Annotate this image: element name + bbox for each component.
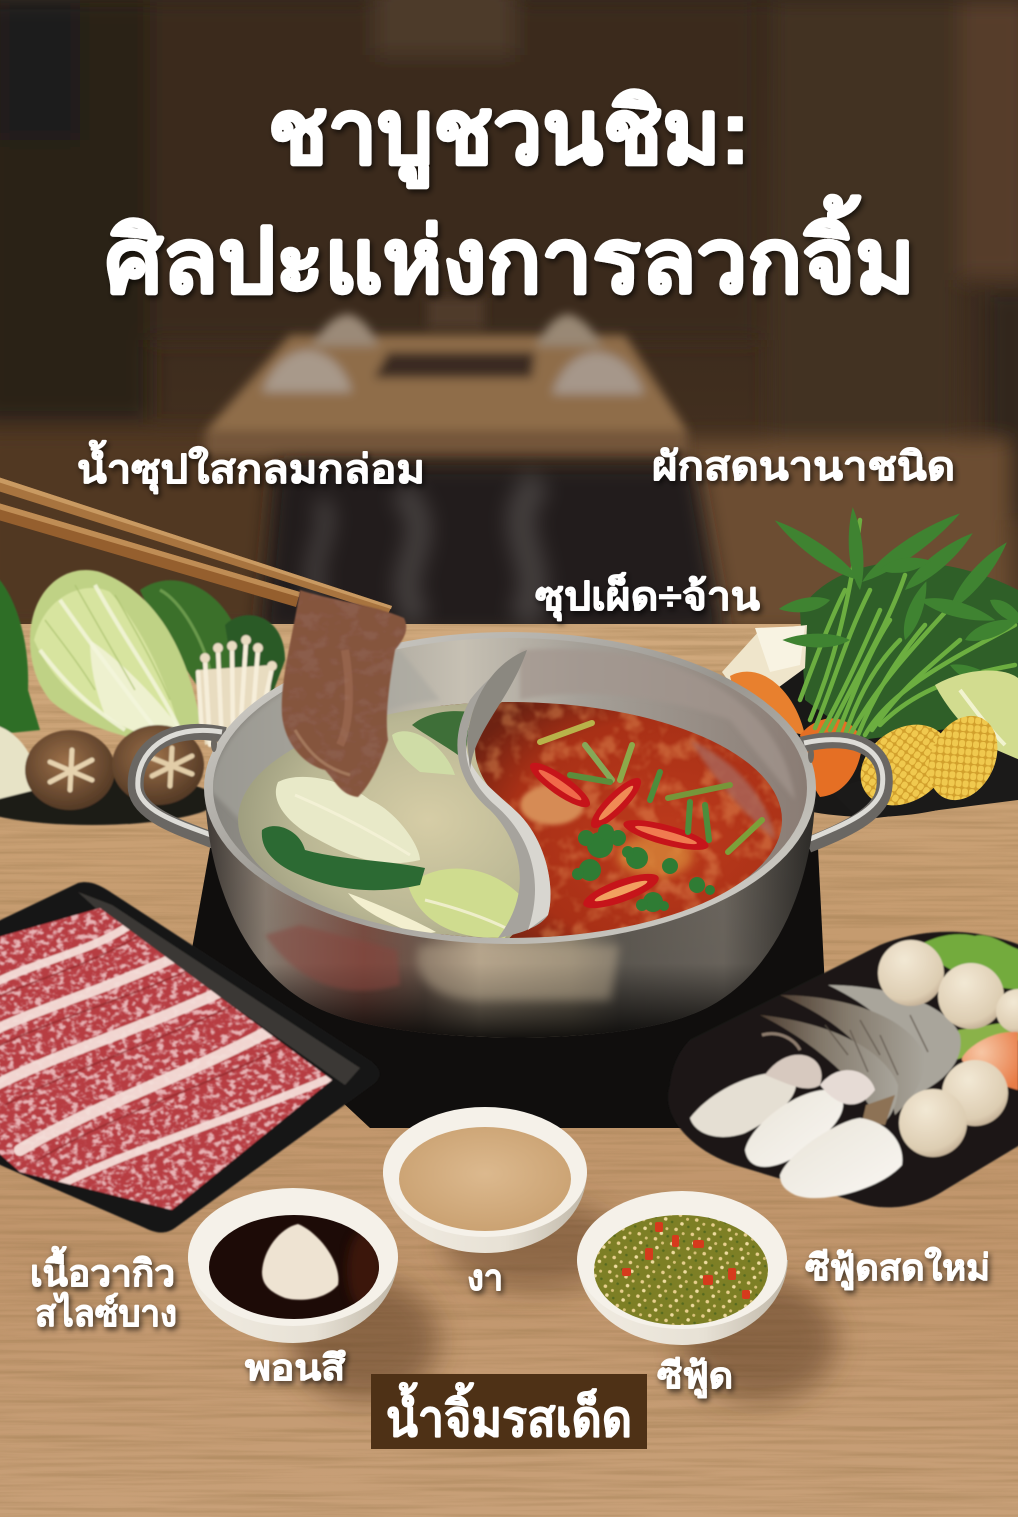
morning glory stems — [800, 520, 1015, 735]
shiitake mushroom behind handle — [112, 725, 204, 805]
left handle — [136, 730, 225, 842]
label: spicy soup: ซุปเผ็ด÷จ้าน — [535, 571, 760, 622]
title: ชาบูชวนชิม: — [268, 83, 750, 188]
napa and corn — [935, 670, 1018, 760]
pot interior — [213, 638, 807, 938]
label: sesame: งา — [467, 1257, 503, 1298]
wooden table — [0, 624, 1018, 1517]
label: sliced wagyu: เนื้อวากิว — [30, 1246, 175, 1294]
hot pot — [136, 632, 885, 1038]
plate: sliced wagyu beef — [0, 882, 380, 1233]
divider plate — [457, 650, 551, 938]
pot body — [205, 790, 815, 1038]
dense leaf backdrop — [800, 562, 1018, 740]
label: sliced wagyu — [30, 1246, 177, 1334]
shiitake mushroom — [25, 730, 115, 810]
chili slices — [525, 756, 711, 915]
sliced beef — [281, 590, 407, 798]
sauce bowl: seafood — [577, 1191, 838, 1402]
title: ศิลปะแห่งการลวกจิ้ม — [105, 195, 915, 312]
soup: spicy red — [440, 695, 790, 945]
title — [105, 83, 915, 312]
plate: assorted seafood — [668, 932, 1018, 1207]
rivets — [211, 736, 814, 763]
morning glory leaves — [770, 506, 1018, 700]
plate: napa cabbage, mushrooms and enoki — [0, 570, 285, 825]
induction cooker — [190, 848, 832, 1128]
label: ponzu: พอนสึ — [245, 1347, 346, 1388]
fish balls — [878, 940, 1018, 1157]
background: distant dining table — [205, 298, 688, 456]
carrots — [730, 672, 805, 735]
lettuce — [912, 934, 1018, 990]
label: fresh vegetables: ผักสดนานาชนิด — [652, 445, 955, 489]
tofu — [722, 625, 807, 690]
label: fresh seafood: ซีฟู้ดสดใหม่ — [805, 1246, 990, 1291]
enoki mushrooms — [198, 635, 277, 745]
green onion pieces — [540, 723, 762, 852]
background: blurred restaurant room — [0, 0, 1018, 640]
grated radish — [262, 1224, 338, 1300]
label: seafood sauce: ซีฟู้ด — [657, 1355, 733, 1399]
chopsticks holding beef — [0, 476, 415, 800]
sauce bowl: ponzu — [188, 1188, 440, 1402]
background: dark area with rising steam — [260, 465, 725, 635]
plate: fresh vegetables — [702, 506, 1018, 822]
cilantro leaves — [572, 824, 715, 912]
squid bodies — [690, 1055, 902, 1198]
pot rim — [204, 632, 816, 944]
label: sliced wagyu: สไลซ์บาง — [35, 1291, 177, 1334]
sauce bowl: sesame — [383, 1107, 625, 1290]
label: clear broth: น้ำซุปใสกลมกล่อม — [77, 440, 425, 495]
chopsticks — [0, 476, 392, 614]
right handle — [800, 740, 885, 845]
soup: clear broth — [238, 702, 520, 938]
shrimp — [760, 985, 961, 1125]
banner: signature dipping sauces: น้ำจิ้มรสเด็ด — [386, 1382, 632, 1447]
napa cabbage — [30, 570, 200, 745]
cabbage pieces — [276, 777, 420, 863]
